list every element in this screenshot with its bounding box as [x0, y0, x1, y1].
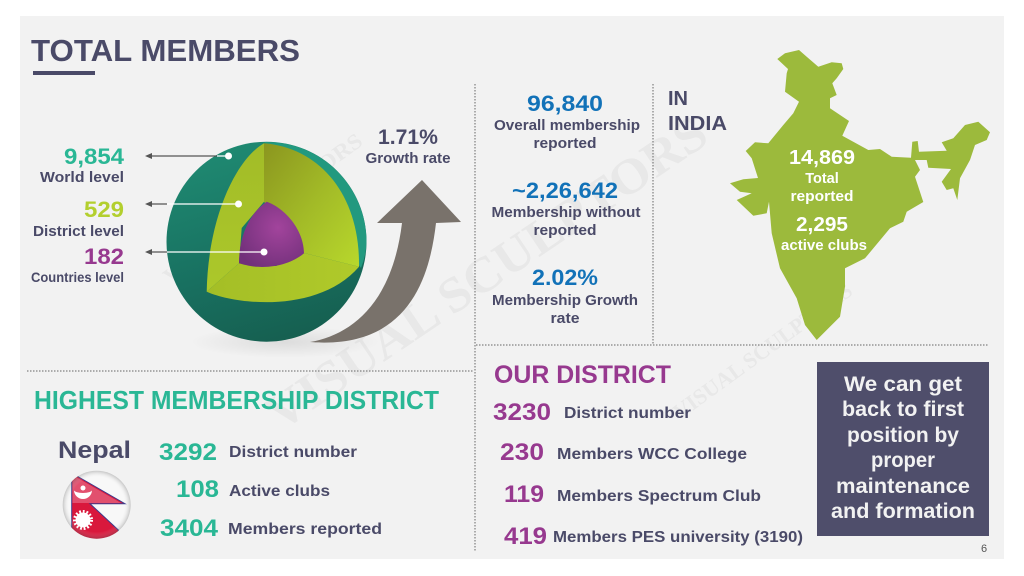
page number: 6	[981, 543, 987, 555]
countries level stat: Countries level	[31, 270, 124, 285]
membership without reported	[492, 178, 641, 239]
India stats	[781, 147, 867, 254]
callout: back to first	[842, 397, 964, 421]
membership growth	[492, 265, 638, 327]
callout: position by	[847, 423, 959, 447]
members reported row: 3404	[160, 515, 219, 542]
growth arrow	[310, 180, 461, 343]
overall membership	[494, 91, 640, 152]
membership growth: rate	[550, 311, 580, 327]
district number row: 3292	[159, 439, 217, 466]
overall membership: Overall membership	[494, 118, 640, 134]
district number row: District number	[564, 405, 691, 422]
panel: highest membership district	[34, 387, 439, 545]
world level stat: World level	[40, 170, 124, 186]
overall membership: reported	[534, 136, 596, 152]
district level stat: 529	[84, 197, 124, 222]
WCC row: Members WCC College	[557, 446, 747, 463]
watermark: VISUAL SCULPTORS	[158, 128, 367, 289]
callout	[817, 362, 989, 536]
icon: Nepal flag	[63, 471, 131, 545]
pointer lines	[150, 156, 264, 252]
growth rate label: Growth rate	[366, 151, 450, 167]
panel: India	[668, 50, 990, 340]
Spectrum row: Members Spectrum Club	[557, 488, 761, 505]
callout: We can get	[844, 372, 962, 396]
country name: Nepal	[58, 437, 131, 464]
PES row: Members PES university (3190)	[553, 529, 803, 546]
active clubs row: Active clubs	[229, 483, 330, 500]
membership without reported: ~2,26,642	[512, 178, 618, 203]
Spectrum row	[504, 481, 761, 508]
membership without reported: reported	[534, 223, 596, 239]
title: TOTAL MEMBERS	[31, 33, 300, 68]
district number row	[159, 439, 357, 466]
India stats: 2,295	[796, 214, 848, 236]
WCC row: 230	[500, 439, 544, 466]
world level stat: 9,854	[64, 144, 125, 169]
India stats: reported	[790, 189, 854, 205]
panel: sphere levels	[31, 126, 461, 358]
district level stat	[33, 197, 124, 240]
heading: OUR DISTRICT	[494, 361, 671, 389]
callout: maintenance	[836, 474, 970, 498]
growth rate label: 1.71%	[378, 126, 438, 149]
PES row: 419	[504, 523, 547, 550]
members reported row	[160, 515, 382, 542]
India stats: Total	[805, 171, 839, 187]
membership growth: Membership Growth	[492, 293, 638, 309]
India stats: 14,869	[789, 147, 855, 169]
panel: overall membership stats	[492, 91, 641, 327]
watermark: VISUAL SCULPTORS	[255, 104, 717, 441]
world level stat	[40, 144, 125, 186]
in india heading: INDIA	[668, 113, 727, 135]
callout: and formation	[831, 499, 975, 523]
countries level stat: 182	[84, 244, 124, 269]
overall membership: 96,840	[527, 91, 603, 116]
panel: our district	[493, 361, 803, 550]
watermark	[158, 104, 857, 441]
India stats: active clubs	[781, 238, 867, 254]
active clubs row	[176, 476, 330, 503]
district number row: 3230	[493, 399, 551, 426]
district level stat: District level	[33, 224, 124, 240]
PES row	[504, 523, 803, 550]
callout: proper	[871, 448, 936, 472]
heading: HIGHEST MEMBERSHIP DISTRICT	[34, 387, 439, 415]
countries level stat	[31, 244, 124, 285]
membership without reported: Membership without	[492, 205, 641, 221]
dividers	[27, 84, 988, 552]
Spectrum row: 119	[504, 481, 544, 508]
layered sphere	[166, 142, 380, 358]
district number row: District number	[229, 444, 357, 461]
members reported row: Members reported	[228, 521, 382, 538]
map of India	[730, 50, 990, 340]
WCC row	[500, 439, 747, 466]
in india heading	[668, 88, 727, 135]
membership growth: 2.02%	[532, 265, 598, 290]
watermark: VISUAL SCULPTORS	[668, 277, 857, 424]
active clubs row: 108	[176, 476, 219, 503]
district number row	[493, 399, 691, 426]
growth rate label	[366, 126, 450, 167]
in india heading: IN	[668, 88, 688, 110]
